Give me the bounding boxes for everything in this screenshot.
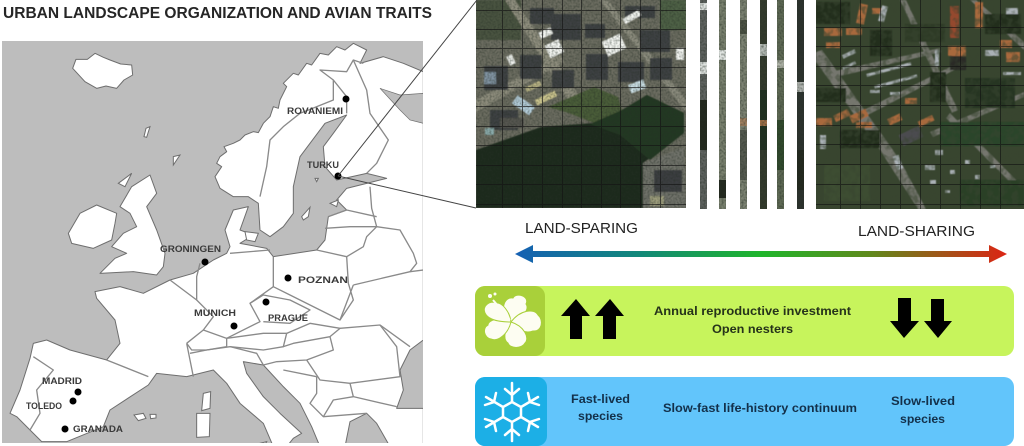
reproductive investment text: Open nesters [712,322,793,336]
city labels: GRANADA [73,424,123,435]
land: Europe mainland [10,43,423,446]
city labels: PRAGUE [268,313,308,324]
land: Ireland [68,205,117,248]
city labels: MUNICH [194,308,236,319]
fast-lived text [571,392,630,423]
reproductive investment text [654,304,851,336]
continuum text: Slow-fast life-history continuum [663,401,857,415]
fast-lived text: species [578,409,623,423]
reproductive investment text: Annual reproductive investment [654,304,851,318]
land-sparing grid [476,0,686,208]
city markers [62,96,350,432]
intermediate strips [700,0,804,209]
city labels: MADRID [42,376,82,387]
slow-lived text [891,394,955,426]
gradient double arrow [515,245,1007,263]
land: Iceland [73,53,133,88]
city labels: POZNAN [298,275,348,286]
islands [118,127,338,446]
city labels: TURKU [307,160,339,171]
slow-lived text: Slow-lived [891,394,955,408]
fast-lived text: Fast-lived [571,392,630,406]
land-sparing aerial photo [476,0,686,208]
land-sharing aerial photo [816,0,1024,209]
icon: snowflake [475,377,547,446]
icon: down arrows [890,298,952,338]
land-sharing label: LAND-SHARING [858,223,975,240]
icon: hibiscus flower [475,286,545,356]
panel: life-history continuum [475,377,1014,446]
city labels: TOLEDO [26,401,62,412]
national borders [30,60,423,430]
city labels: ROVANIEMI [287,106,343,117]
land-sparing label: LAND-SPARING [525,220,638,237]
title: URBAN LANDSCAPE ORGANIZATION AND AVIAN TRAITS [3,5,432,22]
White Sea [380,88,423,123]
icon: up arrows [561,299,624,339]
city labels [26,106,348,435]
slow-lived text: species [900,412,945,426]
panel: annual reproductive investment [475,286,1014,356]
land-sharing grid [816,0,1024,209]
land: Great Britain [100,175,165,275]
map of Europe [2,41,423,446]
zoom lines from Turku [338,0,477,208]
city labels: GRONINGEN [160,244,221,255]
